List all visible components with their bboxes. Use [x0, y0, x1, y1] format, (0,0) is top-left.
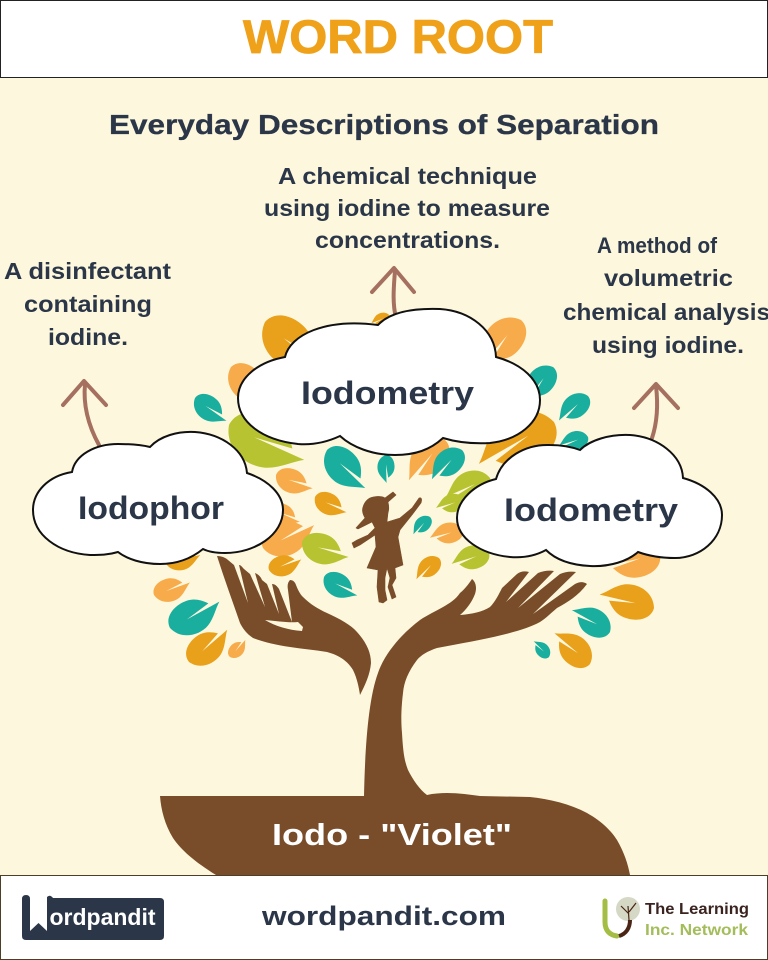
header banner [0, 0, 768, 78]
text block: right definition [563, 233, 768, 358]
text block: left definition: containing [24, 291, 152, 317]
logo: Wordpandit: ordpandit [50, 904, 156, 930]
left hand [217, 556, 371, 695]
footer [0, 876, 768, 960]
text block: right definition: chemical analysis [563, 299, 768, 325]
cloud: right Iodometry [457, 435, 722, 566]
cloud label: Iodophor [78, 490, 224, 526]
text block: center definition: concentrations. [315, 227, 500, 253]
text block: center definition: using iodine to measure [264, 195, 550, 221]
text block: center definition [264, 163, 550, 253]
logo: The Learning Inc. Network: Inc. Network [645, 922, 748, 939]
cloud label: Iodometry [301, 375, 474, 411]
text block: left definition: A disinfectant [4, 258, 171, 284]
text block: right definition: volumetric [604, 265, 733, 291]
cloud label: Iodometry [504, 492, 678, 528]
text block: center definition: A chemical technique [278, 163, 537, 189]
text block: left definition: iodine. [48, 324, 128, 350]
website address: wordpandit.com [261, 901, 506, 931]
logo: Wordpandit [22, 895, 164, 940]
arrow: left [63, 381, 106, 445]
arrow: right [634, 384, 678, 438]
tree trunk with right hand and ground [160, 571, 630, 875]
tree leaves [150, 305, 663, 675]
cloud: left Iodophor [33, 432, 283, 564]
cloud: center Iodometry [238, 309, 540, 455]
arrow: center [372, 268, 414, 318]
text block: left definition [4, 258, 171, 350]
text block: right definition: A method of [597, 233, 718, 258]
heading: Everyday Descriptions of Separation [109, 109, 659, 140]
child silhouette [352, 492, 422, 603]
logo: The Learning Inc. Network: The Learning [645, 901, 749, 918]
text block: right definition: using iodine. [592, 332, 744, 358]
title: WORD ROOT [243, 10, 553, 63]
root label: Iodo - "Violet" [272, 817, 512, 852]
logo: The Learning Inc. Network [605, 897, 749, 939]
